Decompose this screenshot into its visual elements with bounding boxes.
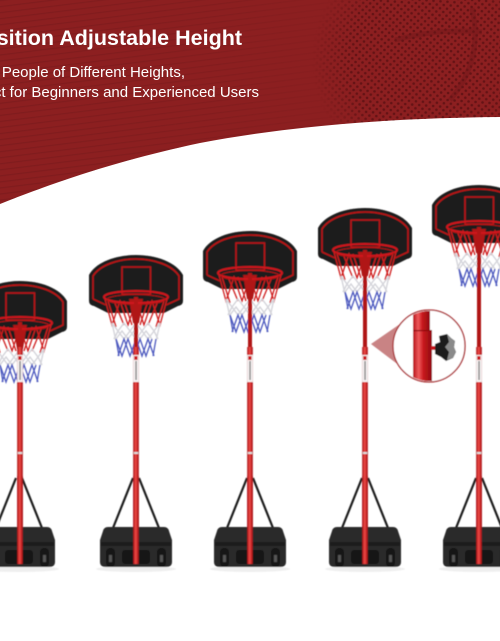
hoop 5	[432, 185, 500, 572]
hoop 4	[318, 208, 412, 572]
hoop 2	[89, 255, 183, 572]
subtitle	[0, 64, 259, 101]
hoop 1	[0, 281, 67, 572]
red banner	[0, 0, 500, 220]
hoop 3	[203, 231, 297, 572]
callout: height adjustment knob	[371, 305, 465, 383]
